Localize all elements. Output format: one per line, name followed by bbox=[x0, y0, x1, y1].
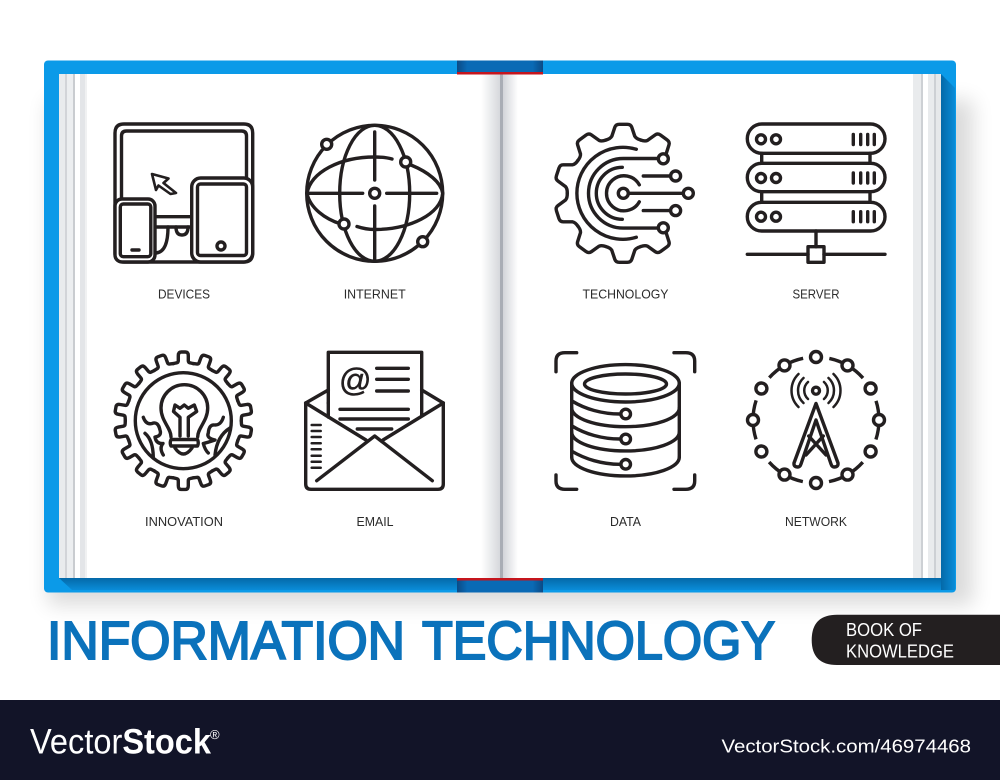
footer bar bbox=[0, 700, 1000, 780]
badge: book of knowledge: KNOWLEDGE bbox=[846, 642, 954, 662]
icon: technology gear bbox=[552, 124, 693, 262]
title: TECHNOLOGY bbox=[422, 611, 775, 671]
icon: server rack bbox=[747, 124, 885, 262]
bottom spine band bbox=[457, 578, 543, 592]
label: network: NETWORK bbox=[785, 515, 848, 529]
icon: network tower bbox=[748, 352, 884, 488]
icon: at sign: @ bbox=[339, 362, 371, 398]
inner cover bottom edge bbox=[59, 578, 941, 590]
white pages bbox=[59, 74, 941, 578]
book drop shadow bbox=[48, 100, 973, 605]
badge: book of knowledge: BOOK OF bbox=[846, 620, 922, 640]
registered mark: ® bbox=[210, 727, 220, 742]
label: server: SERVER bbox=[792, 287, 840, 301]
book cover bbox=[44, 60, 956, 592]
label: innovation: INNOVATION bbox=[145, 515, 223, 529]
footer logo: VectorStock bbox=[30, 722, 211, 761]
icon: innovation gear with bulb bbox=[114, 352, 253, 489]
label: data: DATA bbox=[610, 515, 642, 529]
top spine band bbox=[457, 60, 543, 74]
icon: internet globe bbox=[307, 125, 443, 261]
spine shadow bbox=[481, 74, 518, 578]
title: INFORMATION bbox=[47, 611, 405, 671]
label: email: EMAIL bbox=[356, 515, 394, 529]
label: devices: DEVICES bbox=[158, 287, 210, 301]
badge: book of knowledge bbox=[812, 615, 1000, 665]
footer url: VectorStock.com/46974468 bbox=[722, 737, 971, 757]
book bbox=[44, 60, 973, 605]
icon: email envelope bbox=[306, 352, 443, 489]
icon: devices bbox=[115, 124, 253, 262]
right page edges bbox=[913, 74, 941, 578]
left page edges bbox=[59, 74, 87, 578]
inner cover right edge bbox=[941, 74, 955, 590]
label: internet: INTERNET bbox=[344, 287, 406, 301]
label: technology: TECHNOLOGY bbox=[582, 287, 669, 301]
icon: data cylinder bbox=[556, 353, 695, 489]
title bbox=[47, 611, 775, 671]
